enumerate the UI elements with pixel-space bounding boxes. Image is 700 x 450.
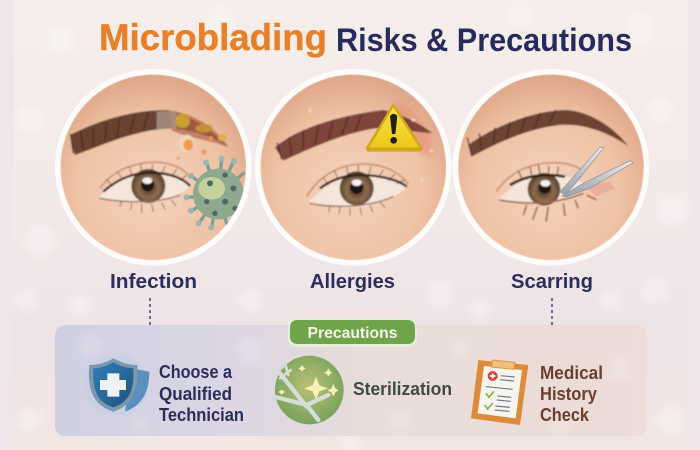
skin — [260, 74, 446, 260]
text: Choose a Qualified Technician: Technician — [159, 404, 244, 425]
text: Medical History Check: History — [540, 383, 598, 404]
panel: infection photo — [55, 69, 252, 266]
brow hairs — [467, 110, 556, 156]
text: Medical History Check: Check — [540, 404, 590, 425]
text: Medical History Check — [540, 362, 603, 425]
pimples — [308, 109, 433, 182]
panel: scarring photo — [453, 69, 649, 266]
panel background — [55, 325, 646, 436]
skin — [458, 74, 644, 260]
bokeh — [78, 333, 633, 434]
text: Choose a Qualified Technician — [159, 361, 244, 425]
label: Allergies: Allergies — [310, 270, 395, 293]
text: Choose a Qualified Technician: Choose a — [159, 361, 233, 382]
white ring — [453, 69, 649, 266]
text: Sterilization: Sterilization — [353, 378, 452, 399]
icon: shield — [85, 355, 149, 415]
dotted connector: infection — [149, 298, 151, 328]
label: Infection: Infection — [110, 270, 197, 293]
brow hairs — [71, 112, 148, 153]
label: Scarring: Scarring — [511, 270, 593, 293]
eyebrow — [70, 110, 228, 155]
eye — [497, 163, 597, 222]
eye — [307, 164, 408, 216]
panel: allergies photo — [255, 69, 452, 266]
title word: Microblading: Microblading — [99, 17, 327, 58]
text: Medical History Check: Medical — [540, 362, 603, 383]
infected skin and pustules — [157, 110, 228, 160]
panel: precautions — [55, 298, 646, 436]
skin — [60, 74, 246, 260]
eyebrow — [275, 110, 433, 161]
text: Choose a Qualified Technician: Qualified — [159, 383, 232, 404]
icon: medical clipboard — [471, 360, 528, 425]
dotted connector: scarring — [551, 298, 553, 328]
irritated skin — [394, 102, 433, 157]
white ring — [55, 69, 252, 266]
eye — [98, 162, 190, 213]
white ring — [255, 69, 452, 266]
scar marks — [588, 182, 614, 196]
icon: tweezers — [560, 147, 633, 197]
title words: Risks & Precautions: Risks & Precautions — [336, 22, 632, 58]
title — [99, 17, 632, 58]
precautions badge — [288, 319, 417, 347]
icon: sterilized tools — [274, 356, 344, 424]
eyebrow — [468, 110, 628, 157]
icon: virus — [184, 156, 248, 230]
precautions badge: Precautions — [308, 325, 398, 342]
icon: warning triangle — [367, 105, 421, 151]
brow hairs — [277, 114, 362, 159]
